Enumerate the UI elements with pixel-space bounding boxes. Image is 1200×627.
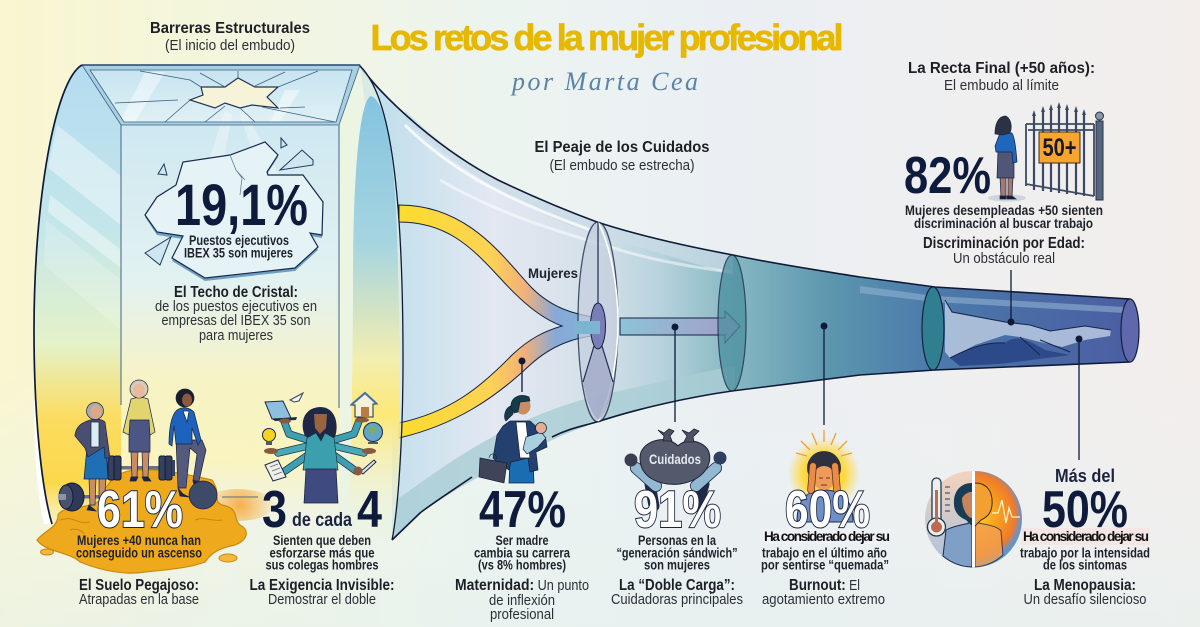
stat: más del 50%: trabajo por la intensidad <box>1020 546 1150 560</box>
wrench <box>360 460 376 474</box>
heading: La Recta Final <box>908 60 1095 94</box>
mouth top pane <box>82 65 360 125</box>
stat: 3 de cada 4: sus colegas hombres <box>266 558 378 572</box>
funnel tube <box>360 66 1130 540</box>
stat: 60%: trabajo en el último año <box>762 546 887 560</box>
icon: woman at gate <box>988 116 1026 202</box>
broken glass shard <box>145 138 323 281</box>
text: El Techo de Cristal <box>155 284 317 344</box>
globe <box>364 422 382 442</box>
icon: multitasking woman <box>262 393 382 503</box>
text: Discriminación por Edad: Discriminación por Edad: <box>923 235 1085 252</box>
heading: El Peaje de los Cuidados <box>534 139 710 174</box>
text: La Exigencia Invisible: Demostrar el doble <box>268 592 376 608</box>
stat: 3 de cada 4: de cada <box>292 510 352 531</box>
text: Burnout: agotamiento extremo <box>762 592 885 608</box>
stat: 47%: Ser madre <box>496 533 549 548</box>
heading: La Recta Final: La Recta Final (+50 años): <box>908 60 1095 77</box>
crack in tube <box>945 300 1111 366</box>
stat: 3 de cada 4: 4 <box>357 481 382 539</box>
stat: 91%: 91% <box>634 481 721 539</box>
stat: 19,1%: 19,1% <box>175 173 308 238</box>
stat: 82%: 82% <box>904 147 991 205</box>
stat: 19,1%: IBEX 35 son mujeres <box>184 246 293 260</box>
icon: barbell lower <box>58 483 100 511</box>
label: Mujeres: Mujeres <box>528 266 578 281</box>
stat: 61% <box>76 481 202 560</box>
text: La Menopausia: Un desafío silencioso <box>1024 592 1146 608</box>
stat: 91%: Personas en la <box>638 533 716 548</box>
filter ring 3 and end of tube <box>922 287 1139 370</box>
stat: 19,1% <box>175 173 308 260</box>
tube lower teal band <box>392 366 735 540</box>
text: La Doble Carga: La “Doble Carga”: <box>619 577 735 594</box>
label: Cuidados: Cuidados <box>649 451 701 467</box>
stat: 61%: 61% <box>97 481 183 539</box>
stat: más del 50%: Ha considerado dejar su <box>1023 529 1149 544</box>
heading: Barreras Estructurales: (El inicio del embudo) <box>165 38 295 54</box>
icon: mother with baby and briefcase <box>479 395 547 483</box>
icon: barbell upper <box>108 456 175 480</box>
clipboard <box>265 460 286 481</box>
text: Discriminación por Edad <box>923 235 1085 267</box>
mouth outline <box>34 65 82 524</box>
text: El Suelo Pegajoso: Atrapadas en la base <box>79 592 199 608</box>
laptop <box>265 401 291 419</box>
icon: burnout woman <box>788 430 860 522</box>
text: La Menopausia <box>1024 577 1146 608</box>
women stream splitting into the funnel <box>399 205 600 438</box>
stat: 60%: por sentirse “quemada” <box>761 558 889 572</box>
icon: menopause split circle <box>925 471 1022 567</box>
tube outline <box>360 66 1130 299</box>
text: Maternidad: Maternidad: Un punto <box>455 577 589 594</box>
stat: 82%: Mujeres desempleadas +50 sienten <box>905 203 1103 218</box>
stat: 82%: discriminación al buscar trabajo <box>914 216 1093 231</box>
title: Los retos de la mujer profesional <box>370 17 844 58</box>
text: El Suelo Pegajoso: El Suelo Pegajoso: <box>79 577 199 594</box>
text: Maternidad: de inflexión <box>489 593 555 609</box>
text: La Exigencia Invisible <box>250 577 394 608</box>
text: Burnout <box>762 577 885 608</box>
icon: gate with 50+ sign <box>1026 102 1104 200</box>
arrow through funnel <box>620 311 740 343</box>
bulb <box>262 428 276 442</box>
heading: El Peaje de los Cuidados: El Peaje de los Cuidados <box>534 139 710 156</box>
broken hole <box>190 78 278 108</box>
text: La Doble Carga: Cuidadoras principales <box>611 592 743 608</box>
icon: woman with grey hair <box>75 402 110 511</box>
stat: 91%: “generación sándwich” <box>616 546 738 560</box>
text: La Menopausia: La Menopausia: <box>1034 577 1136 594</box>
funnel mouth <box>34 65 403 540</box>
stat: más del 50%: 50% <box>1042 481 1128 539</box>
stat: 60%: 60% <box>785 481 870 539</box>
text: El Suelo Pegajoso <box>79 577 199 608</box>
stat: 60%: Ha considerado dejar su <box>764 529 890 544</box>
heading: La Recta Final: El embudo al límite <box>944 78 1059 94</box>
text: El Techo de Cristal: para mujeres <box>199 328 273 344</box>
tube upper highlight <box>405 110 733 275</box>
subtitle: author: por Marta Cea <box>510 67 698 96</box>
stat: 47% <box>474 481 570 572</box>
heading: Barreras Estructurales: Barreras Estructurales <box>150 20 310 37</box>
text: Burnout: Burnout: El <box>789 577 860 594</box>
sticky puddle <box>37 470 246 573</box>
pointer lines <box>519 270 1082 460</box>
house <box>351 393 377 417</box>
text: La Exigencia Invisible: La Exigencia Invisible: <box>250 577 394 594</box>
stat: 61%: Mujeres +40 nunca han <box>77 533 201 548</box>
stat: 82% <box>904 147 1103 231</box>
icon: gate with 50+ sign: 50+ <box>1042 134 1076 162</box>
arms <box>278 421 364 471</box>
stat: 3 de cada 4 <box>262 481 382 572</box>
glass streaks <box>48 125 121 268</box>
filter ring 1 <box>575 222 618 422</box>
stat: 3 de cada 4: 3 <box>262 481 287 539</box>
stat: 47%: (vs 8% hombres) <box>478 558 566 572</box>
stat: 19,1%: Puestos ejecutivos <box>189 233 289 248</box>
stat: más del 50%: Más del <box>1055 466 1115 486</box>
stat: 91% <box>616 481 738 572</box>
filter ring 2 <box>718 255 746 391</box>
heading: El Peaje de los Cuidados: (El embudo se estrecha) <box>550 158 694 174</box>
text: Maternidad <box>455 577 589 623</box>
stat: 47%: 47% <box>479 481 566 539</box>
heading: Barreras Estructurales <box>150 20 310 54</box>
text: Discriminación por Edad: Un obstáculo real <box>953 251 1055 267</box>
icon: woman with yellow blouse <box>123 380 155 481</box>
stat: 3 de cada 4: Sienten que deben <box>273 533 371 548</box>
text: El Techo de Cristal: de los puestos ejecutivos en <box>155 299 317 315</box>
stat: más del 50% <box>1020 466 1150 572</box>
text: La Doble Carga <box>611 577 743 608</box>
text: El Techo de Cristal: empresas del IBEX 35 son <box>162 313 310 329</box>
stat: 3 de cada 4: esforzarse más que <box>270 546 375 560</box>
text: El Techo de Cristal: El Techo de Cristal: <box>174 284 298 301</box>
stat: 47%: cambia su carrera <box>474 546 570 560</box>
text: Maternidad: profesional <box>490 607 554 623</box>
stat: 61%: conseguido un ascenso <box>76 546 202 560</box>
stat: 91%: son mujeres <box>644 558 710 572</box>
icon: people carrying care bags <box>624 429 726 506</box>
connector puddle to 3 de cada 4 <box>202 489 274 521</box>
plane <box>290 393 303 402</box>
stat: más del 50%: de los sintomas <box>1043 558 1127 572</box>
icon: woman with blue blazer and ball <box>169 389 217 509</box>
stat: 60% <box>761 481 891 572</box>
